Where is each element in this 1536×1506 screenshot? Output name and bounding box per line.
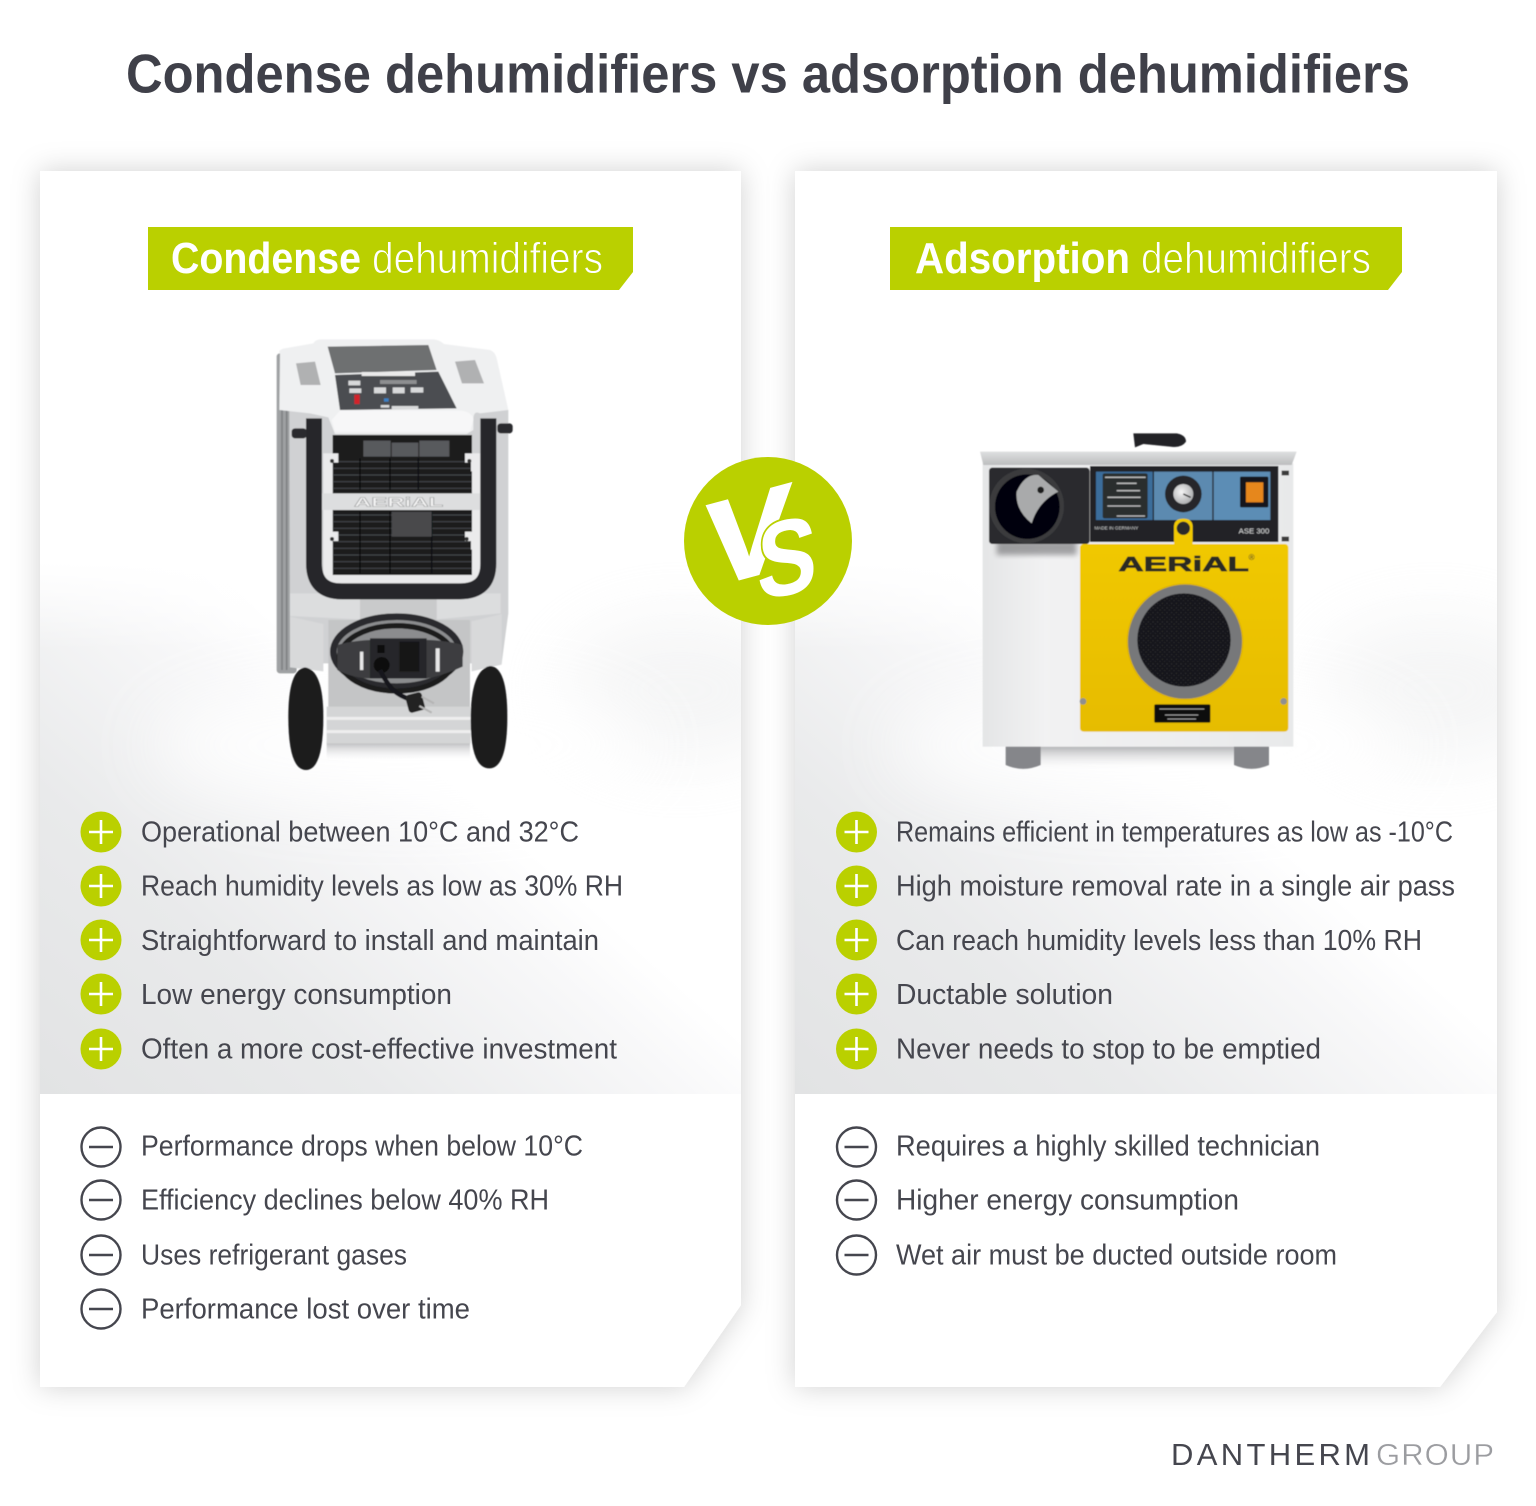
icon: minus [837,1180,876,1220]
icon: minus [837,1128,876,1166]
image: adsorption dehumidifier: ASE 300 [1239,528,1269,535]
image: adsorption dehumidifier: AERiAL [1118,553,1249,576]
panel: condense dehumidifiers [40,171,800,1387]
icon: minus [82,1290,120,1328]
icon: minus [82,1236,120,1274]
image: adsorption dehumidifier: MADE IN GERMANY [1094,526,1138,531]
pros list: adsorption [836,812,1455,1070]
con item: Efficiency declines below 40% RH [141,1184,549,1216]
heading: condense [148,227,633,290]
heading: condense: dehumidifiers [372,234,603,283]
icon: plus [836,1028,877,1070]
logo: dantherm group: GROUP [1376,1437,1494,1472]
con item: Performance drops when below 10°C [141,1130,583,1162]
icon: plus [80,1028,122,1070]
pros list: condense [80,812,623,1070]
con item: Uses refrigerant gases [141,1240,407,1272]
pro item: Never needs to stop to be emptied [896,1034,1321,1066]
pro item: High moisture removal rate in a single air pass [896,870,1455,902]
icon: plus [836,866,877,906]
icon: plus [836,812,877,852]
image: condense dehumidifier [277,339,513,770]
icon: plus [80,920,122,960]
image: condense dehumidifier: AERiAL [354,496,444,510]
image: adsorption dehumidifier [980,433,1297,769]
icon: plus [80,974,122,1014]
icon: minus [82,1128,120,1166]
image: adsorption dehumidifier: ® [1249,553,1255,562]
icon: plus [80,812,122,852]
heading: adsorption [890,227,1402,290]
con item: Wet air must be ducted outside room [896,1240,1337,1272]
heading: adsorption: dehumidifiers [1141,234,1371,283]
heading: condense: Condense [171,234,361,283]
cons list: adsorption [837,1128,1337,1274]
pro item: Low energy consumption [141,979,452,1011]
pro item: Remains efficient in temperatures as low as -10°C [896,816,1453,848]
icon: minus [82,1180,120,1220]
pro item: Reach humidity levels as low as 30% RH [141,870,623,902]
panel: adsorption dehumidifiers [795,171,1536,1387]
icon: plus [836,920,877,960]
con item: Higher energy consumption [896,1184,1239,1216]
heading: adsorption: Adsorption [915,234,1130,283]
icon: plus [80,866,122,906]
title: Condense dehumidifiers vs adsorption dehumidifiers [126,42,1410,104]
con item: Requires a highly skilled technician [896,1130,1320,1162]
pro item: Ductable solution [896,979,1113,1011]
icon: plus [836,974,877,1014]
pro item: Straightforward to install and maintain [141,925,599,957]
vs badge [684,457,852,625]
icon: minus [837,1236,876,1274]
vs badge: V [707,459,791,613]
pro item: Often a more cost-effective investment [141,1034,617,1066]
con item: Performance lost over time [141,1294,470,1326]
logo: dantherm group [1171,1437,1494,1472]
logo: dantherm group: DANTHERM [1171,1437,1370,1472]
cons list: condense [82,1128,583,1328]
pro item: Can reach humidity levels less than 10% RH [896,925,1422,957]
vs badge: S [757,492,817,624]
pro item: Operational between 10°C and 32°C [141,816,579,848]
